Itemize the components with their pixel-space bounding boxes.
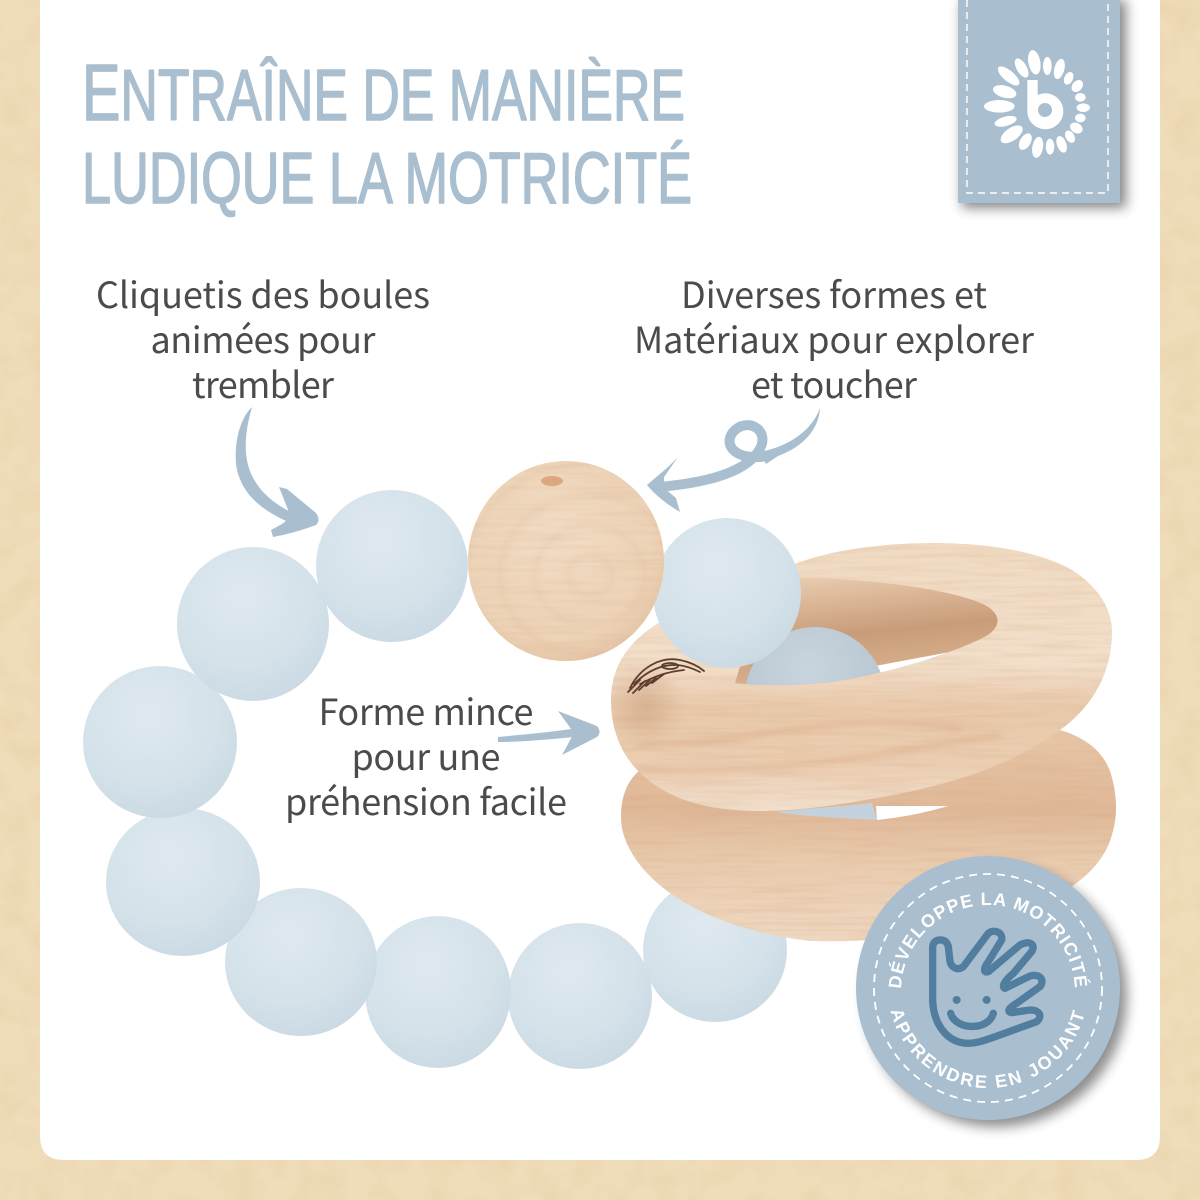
title [82,48,692,219]
callout: slim shape: préhension facile [285,774,567,826]
callout: slim shape: pour une [352,729,500,781]
silicone beads [83,490,801,1069]
callout: bead rattle [96,267,430,409]
bottom wooden ring [610,725,1125,950]
callout: bead rattle: animées pour [150,312,377,364]
wood burn mark [628,659,704,693]
lower silicone bead behind ring [643,878,787,1022]
callout: shapes and materials: Diverses formes et [681,267,987,319]
callout: bead rattle: Cliquetis des boules [96,267,430,319]
bead seen through bottom ring [776,803,877,820]
tag body [958,0,1120,203]
tag stitching [967,0,1108,193]
title: ENTRAÎNE DE MANIÈRE [82,48,685,137]
badge stitching [874,874,1102,1102]
arrow: to silicone bead [236,407,318,537]
title: LUDIQUE LA MOTRICITÉ [82,139,692,219]
callout: bead rattle: trembler [192,357,335,409]
product: silicone and wood rattle [83,461,1125,1069]
badge top text: DÉVELOPPE LA MOTRICITÉ [888,892,1091,988]
arrow: to wooden bead [647,408,820,512]
callout: shapes and materials [634,267,1035,409]
arrow: to wooden ring [498,711,600,755]
callout: shapes and materials: Matériaux pour explorer [634,312,1035,364]
callout: slim shape: Forme mince [318,684,534,736]
through the hole [746,627,949,686]
badge shadow [865,865,1127,1127]
callout: shapes and materials: et toucher [751,357,918,409]
badge bottom text: APPRENDRE EN JOUANT [890,1010,1084,1088]
top wooden ring [605,540,1115,815]
badge [856,856,1135,1135]
icon: smiling hand [933,931,1042,1043]
icon: sunflower logo [984,49,1090,159]
tag shadow [962,0,1126,208]
ring inner wall [735,578,998,685]
gap in bottom ring [876,806,948,820]
callout: slim shape [285,684,567,826]
badge disc [856,856,1120,1120]
wooden bead [468,461,664,661]
brand tag [958,0,1126,208]
